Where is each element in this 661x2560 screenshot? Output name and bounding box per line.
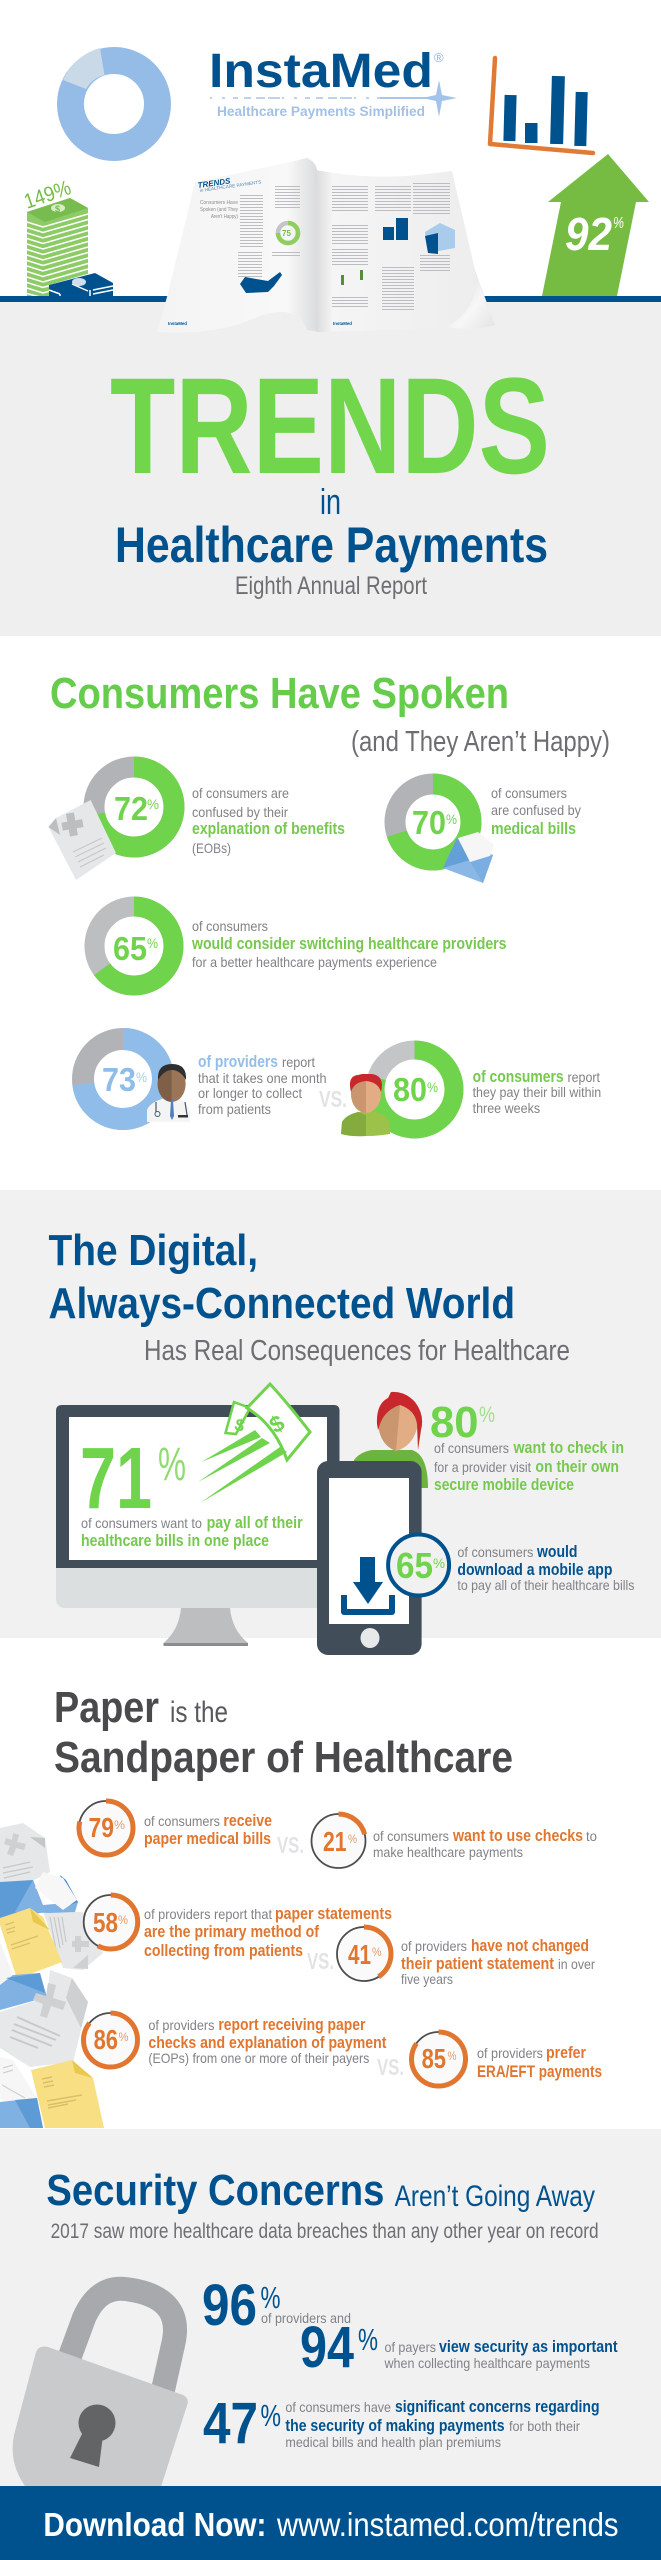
- heading: security: Aren’t Going Away: [395, 2180, 595, 2213]
- stat: 80 percent check in: on their own: [535, 1458, 619, 1476]
- stat: 80 percent check in: secure mobile device: [434, 1476, 574, 1494]
- title block: Healthcare Payments: [115, 517, 548, 573]
- stat: 70 percent: %: [446, 811, 457, 827]
- stat: 79 percent: 79: [88, 1812, 114, 1843]
- stat: 80 percent of consumers: three weeks: [473, 1100, 540, 1116]
- logo: InstaMed: [209, 45, 457, 119]
- label: versus: VS.: [319, 1086, 347, 1112]
- stat: 58 percent: [84, 1895, 392, 1960]
- title block: in: [320, 481, 341, 522]
- stat: 47 percent: of consumers have: [285, 2399, 391, 2415]
- stat: 80 percent check in: want to check in: [513, 1439, 624, 1457]
- stat: 47 percent: %: [260, 2398, 281, 2433]
- stat: 85 percent: 85: [422, 2043, 446, 2074]
- stat: 96 and 94 percent: %: [260, 2280, 280, 2315]
- stat: 86 percent: (EOPs) from one or more of their payers: [148, 2050, 369, 2066]
- footer: download banner: www.instamed.com/trends: [276, 2506, 618, 2543]
- stat: 58 percent: are the primary method of: [144, 1922, 319, 1941]
- image: open report booklet: InstaMed: [333, 321, 352, 326]
- stat: 96 and 94 percent: [202, 2273, 618, 2380]
- icon: stack of money: $: [55, 204, 60, 214]
- logo: InstaMed: Healthcare Payments Simplified: [217, 104, 425, 119]
- stat: 47 percent: 47: [203, 2391, 258, 2456]
- stat: 86 percent: [84, 2013, 387, 2067]
- stat: 80 percent of consumers: they pay their bill within: [473, 1084, 601, 1100]
- stat: 65 percent mobile app: of consumers: [457, 1544, 533, 1560]
- icon: consumer with phone: [354, 1392, 428, 1488]
- stat: 72 percent: explanation of benefits: [192, 820, 345, 838]
- stat: 47 percent: [203, 2391, 600, 2456]
- stat: 96 and 94 percent: of providers and: [261, 2310, 351, 2326]
- heading: consumers have spoken: [50, 669, 610, 758]
- stat: 96 and 94 percent: 94: [300, 2315, 354, 2380]
- panel: consumers have spoken: [48, 669, 610, 1136]
- stat: 73 percent of providers: report: [282, 1054, 315, 1070]
- image: open report booklet: InstaMed: [168, 321, 187, 326]
- stat: 80 percent check in: %: [479, 1402, 495, 1427]
- stat: 47 percent: for both their: [509, 2418, 580, 2434]
- stat: 65 percent mobile app: %: [433, 1555, 445, 1571]
- label: versus: VS.: [277, 1832, 304, 1858]
- stat: 65 percent mobile app: 65: [396, 1545, 433, 1586]
- stat: 86 percent: %: [118, 2030, 129, 2044]
- icon: flying money: $: [233, 1415, 247, 1436]
- logo: InstaMed: ®: [434, 50, 444, 65]
- stat: 96 and 94 percent: of payers: [384, 2339, 436, 2355]
- stat: 96 and 94 percent: view security as important: [439, 2338, 618, 2356]
- icon: pile of paper: [0, 1823, 104, 2128]
- stat: 58 percent: 58: [93, 1907, 118, 1938]
- stat: 79 percent: of consumers: [144, 1813, 220, 1829]
- stat: 85 percent: [412, 2032, 602, 2086]
- icon: doctor: [147, 1064, 190, 1122]
- footer: download banner: Download Now:: [43, 2506, 266, 2543]
- stat: 73 percent of providers: of providers: [198, 1052, 278, 1071]
- icon: green up arrow: 92: [565, 208, 612, 260]
- stat: 41 percent: of providers: [401, 1938, 467, 1954]
- stat: 47 percent: significant concerns regarding: [395, 2398, 600, 2416]
- stat: 73 percent of providers: from patients: [198, 1101, 271, 1117]
- icon: desktop monitor: healthcare bills in one place: [81, 1532, 269, 1550]
- stat: 86 percent: report receiving paper: [218, 2015, 366, 2034]
- stat: 21 percent: want to use checks: [452, 1826, 583, 1845]
- heading: security: Security Concerns: [46, 2166, 384, 2215]
- icon: flying money: $: [265, 1409, 289, 1438]
- logo: InstaMed: InstaMed: [209, 45, 433, 98]
- icon: bar chart: [490, 58, 593, 153]
- stat: 47 percent: medical bills and health plan premiums: [285, 2434, 501, 2450]
- stat: 86 percent: 86: [94, 2024, 118, 2055]
- stat: 65 percent mobile app: to pay all of their healthcare bills: [457, 1577, 634, 1593]
- image: open report booklet: [157, 158, 495, 332]
- stat: 41 percent: 41: [348, 1939, 371, 1970]
- icon: stack of money: [21, 176, 113, 297]
- panel: security: [0, 2129, 661, 2490]
- heading: digital world: Always-Connected World: [48, 1279, 515, 1328]
- icon: donut chart: [63, 48, 158, 148]
- icon: padlock: [13, 2289, 188, 2490]
- stat: 21 percent: make healthcare payments: [373, 1844, 523, 1860]
- stat: 70 percent: medical bills: [491, 820, 576, 838]
- stat: 21 percent: to: [586, 1828, 597, 1844]
- stat: 21 percent: [312, 1814, 597, 1868]
- stat: 85 percent: of providers: [477, 2045, 543, 2061]
- stat: 70 percent: [395, 784, 581, 883]
- stat: 65 percent mobile app: would: [536, 1543, 578, 1561]
- stat: 65 percent: for a better healthcare payments experience: [192, 954, 437, 970]
- stat: 72 percent: [48, 767, 345, 880]
- icon: consumer: [341, 1074, 390, 1136]
- stat: 80 percent check in: 80: [430, 1398, 478, 1447]
- stat: 72 percent: of consumers are: [192, 785, 289, 801]
- stat: 21 percent: 21: [323, 1826, 346, 1857]
- stat: 79 percent: [79, 1801, 272, 1855]
- stat: 41 percent: in over: [558, 1956, 595, 1972]
- stat: 58 percent: %: [118, 1913, 128, 1927]
- icon: desktop monitor: 71: [80, 1430, 152, 1527]
- heading: digital world: Has Real Consequences for Healthcare: [144, 1335, 570, 1367]
- stat: 73 percent of providers: 73: [102, 1061, 136, 1098]
- stat: 58 percent: of providers report that: [144, 1906, 272, 1922]
- heading: paper: [54, 1683, 513, 1782]
- stat: 70 percent: are confused by: [491, 802, 581, 818]
- image: open report booklet: TRENDS: [197, 176, 232, 190]
- stat: 41 percent: have not changed: [471, 1936, 589, 1955]
- stat: 65 percent: 65: [113, 930, 147, 967]
- stat: 72 percent: confused by their: [192, 804, 288, 820]
- stat: 85 percent: prefer: [546, 2043, 586, 2062]
- stat: 73 percent of providers: %: [136, 1069, 147, 1085]
- stat: 80 percent check in: of consumers: [434, 1440, 509, 1456]
- stat: 21 percent: of consumers: [373, 1828, 449, 1844]
- label: versus: VS.: [377, 2054, 404, 2080]
- panel: digital world: [0, 1190, 661, 1655]
- heading: digital world: The Digital,: [48, 1226, 258, 1275]
- icon: green up arrow: %: [613, 215, 624, 232]
- stat: 70 percent: 70: [412, 804, 446, 841]
- stat: 41 percent: %: [372, 1945, 382, 1959]
- icon: desktop monitor: of consumers want to: [81, 1515, 202, 1531]
- stat: 96 and 94 percent: %: [358, 2322, 378, 2357]
- title block: [110, 350, 550, 600]
- stat: 73 percent of providers: [83, 1039, 327, 1122]
- stat: 80 percent check in: [430, 1398, 624, 1494]
- stat: 47 percent: the security of making payments: [285, 2417, 505, 2435]
- stat: 41 percent: their patient statement: [401, 1954, 554, 1973]
- stat: 79 percent: receive: [223, 1811, 272, 1830]
- stat: 65 percent: [94, 906, 506, 986]
- image: open report booklet: Consumers Have: [200, 200, 238, 206]
- stat: 65 percent: of consumers: [192, 918, 268, 934]
- stat: 70 percent: of consumers: [491, 785, 567, 801]
- stat: 72 percent: 72: [114, 790, 148, 827]
- stat: 72 percent: (EOBs): [192, 840, 231, 856]
- heading: paper: Paper: [54, 1683, 159, 1732]
- heading: paper: is the: [170, 1696, 228, 1729]
- icon: desktop monitor: pay all of their: [207, 1514, 303, 1532]
- image: open report booklet: Aren't Happy): [211, 214, 238, 220]
- stat: 85 percent: %: [448, 2049, 457, 2063]
- divider bar: [0, 296, 661, 302]
- stat: 41 percent: five years: [401, 1971, 453, 1987]
- stat: 80 percent of consumers: 80: [393, 1071, 427, 1108]
- stat: 65 percent mobile app: [388, 1534, 634, 1596]
- image: open report booklet: 75: [282, 229, 291, 238]
- heading: security: [46, 2166, 599, 2243]
- stat: 80 percent check in: for a provider visit: [434, 1459, 531, 1475]
- icon: stack of money: 149%: [21, 176, 74, 214]
- label: versus: VS.: [307, 1948, 334, 1974]
- stat: 80 percent of consumers: of consumers: [473, 1068, 564, 1086]
- stat: 86 percent: of providers: [148, 2017, 214, 2033]
- title block: Eighth Annual Report: [235, 572, 427, 600]
- stat: 21 percent: %: [348, 1832, 357, 1846]
- panel: paper: [0, 1683, 602, 2128]
- heading: digital world: [48, 1226, 570, 1367]
- icon: green up arrow: [542, 154, 649, 296]
- stat: 72 percent: %: [147, 796, 159, 812]
- stat: 96 and 94 percent: 96: [202, 2273, 257, 2338]
- stat: 65 percent mobile app: download a mobile app: [457, 1561, 612, 1579]
- panel: header: [0, 45, 661, 636]
- stat: 80 percent of consumers: %: [427, 1079, 438, 1095]
- icon: flying money: [198, 1384, 310, 1503]
- stat: 73 percent of providers: or longer to collect: [198, 1085, 302, 1101]
- stat: 79 percent: %: [114, 1818, 125, 1832]
- heading: consumers have spoken: (and They Aren’t Happy): [351, 726, 610, 758]
- image: open report booklet: Spoken (and They: [200, 207, 238, 213]
- stat: 65 percent: %: [147, 935, 158, 951]
- icon: smartphone: [317, 1461, 422, 1655]
- stat: 80 percent of consumers: [341, 1050, 601, 1136]
- stat: 58 percent: collecting from patients: [144, 1941, 303, 1960]
- footer: download banner: [0, 2486, 661, 2560]
- stat: 73 percent of providers: that it takes one month: [198, 1070, 327, 1086]
- stat: 41 percent: [337, 1927, 595, 1987]
- title block: TRENDS: [110, 350, 550, 503]
- stat: 96 and 94 percent: when collecting healthcare payments: [384, 2355, 590, 2371]
- heading: paper: Sandpaper of Healthcare: [54, 1733, 513, 1782]
- image: open report booklet: in HEALTHCARE PAYMENTS: [199, 179, 262, 193]
- icon: desktop monitor: %: [158, 1437, 186, 1490]
- stat: 58 percent: paper statements: [275, 1904, 392, 1923]
- stat: 79 percent: paper medical bills: [144, 1829, 271, 1848]
- icon: desktop monitor: [56, 1384, 340, 1646]
- stat: 86 percent: checks and explanation of payment: [148, 2033, 387, 2052]
- stat: 80 percent of consumers: report: [568, 1069, 600, 1085]
- heading: consumers have spoken: Consumers Have Spoken: [50, 669, 509, 718]
- stat: 65 percent: would consider switching healthcare providers: [191, 935, 506, 953]
- stat: 85 percent: ERA/EFT payments: [477, 2062, 602, 2081]
